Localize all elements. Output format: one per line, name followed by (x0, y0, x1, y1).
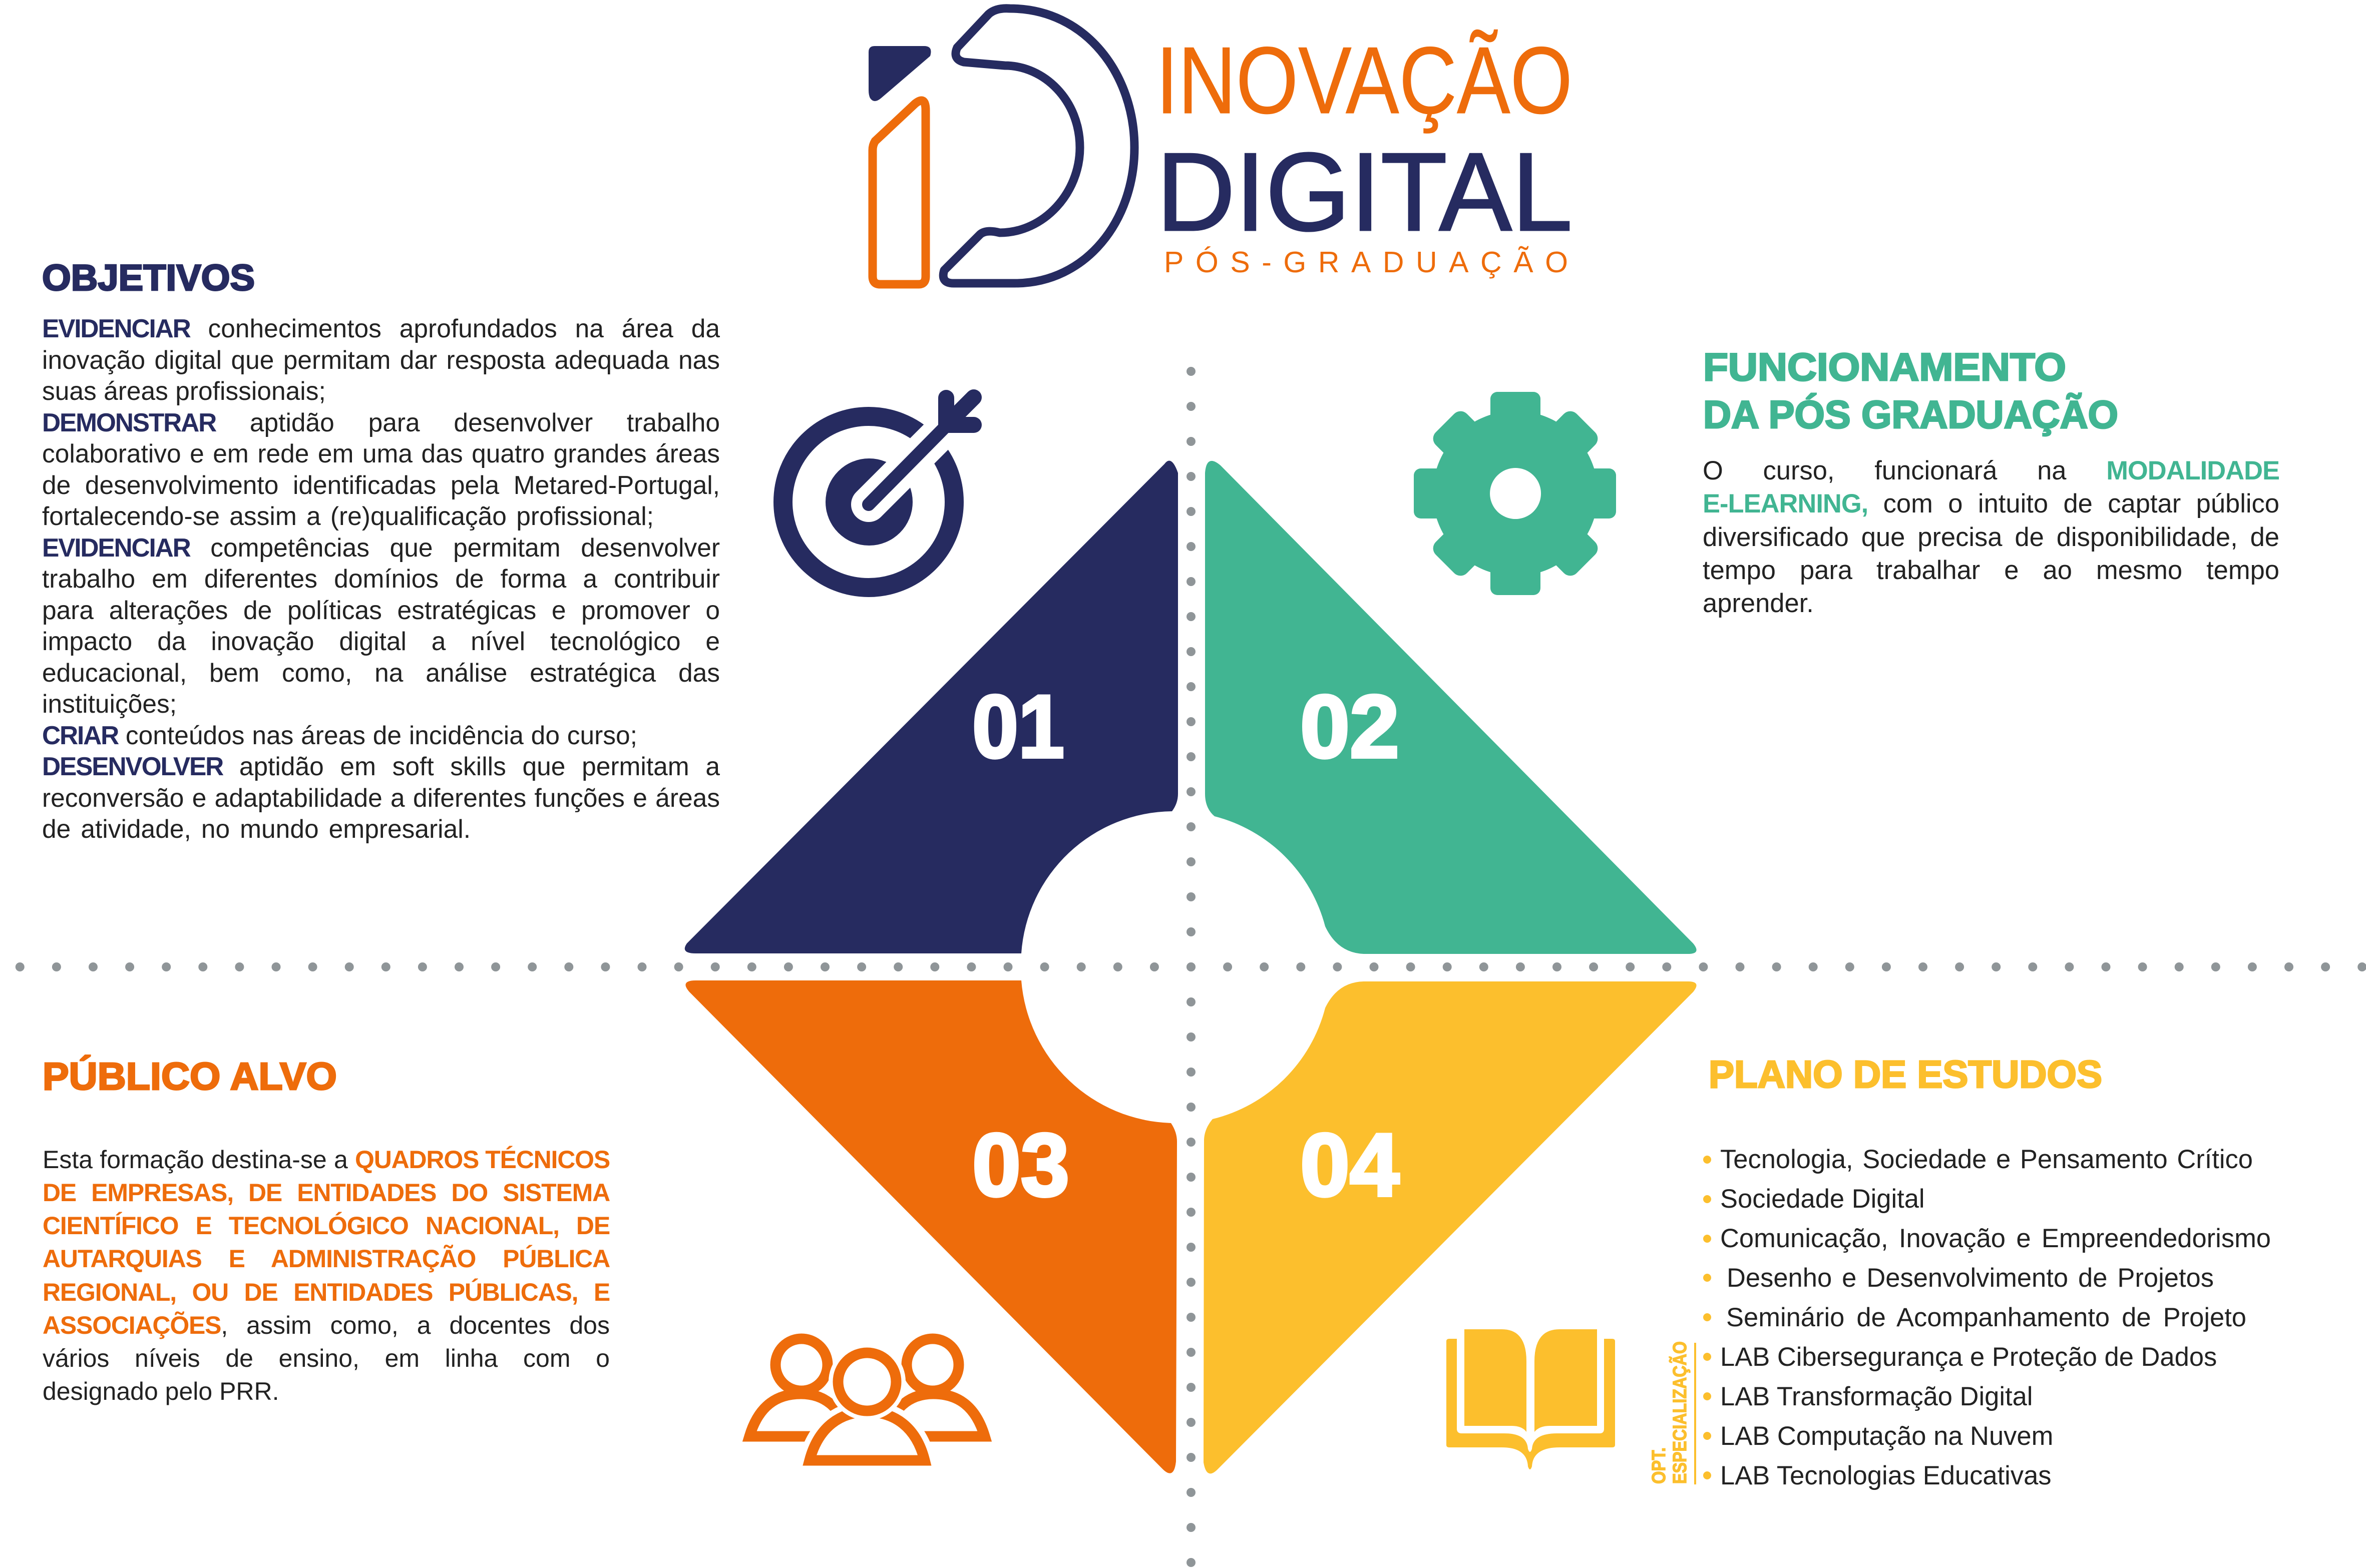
text block: course list (1720, 1144, 2271, 1490)
text block: funcionamento description: E-LEARNING, com o intuito de captar público (1703, 489, 2279, 518)
text block: objetivos list: trabalho em diferentes domínios de forma a contribuir (42, 564, 720, 593)
text block: público alvo description (43, 1145, 610, 1405)
logo: Inovação Digital Pós-Graduação (869, 9, 1572, 284)
list bullets (1703, 1156, 1711, 1479)
panel: público alvo (43, 1055, 610, 1405)
text block: course list: Desenho e Desenvolvimento de Projetos (1727, 1263, 2214, 1292)
text block: objetivos list: educacional, bem como, na análise estratégica das (42, 658, 720, 687)
text block: público alvo description: ASSOCIAÇÕES, assim como, a docentes dos (43, 1311, 610, 1339)
text block: objetivos list: para alterações de políticas estratégicas e promover o (42, 596, 720, 625)
label: opt. especialização: ESPECIALIZAÇÃO (1669, 1341, 1691, 1484)
label: opt. especialização: OPT. (1649, 1447, 1670, 1484)
quadrant 03: 03 (972, 1115, 1069, 1215)
icon: three people (749, 1339, 985, 1460)
heading: funcionamento da pós graduação: FUNCIONAMENTO (1703, 345, 2066, 389)
heading: público alvo: PÚBLICO ALVO (43, 1055, 337, 1098)
text block: funcionamento description: aprender. (1703, 589, 1814, 618)
text block: course list: LAB Tecnologias Educativas (1720, 1460, 2052, 1490)
text block: público alvo description: AUTARQUIAS E ADMINISTRAÇÃO PÚBLICA (43, 1245, 610, 1273)
heading: objetivos: OBJETIVOS (42, 258, 255, 298)
panel: plano de estudos (1709, 1053, 2271, 1490)
text block: course list: Seminário de Acompanhamento de Projeto (1726, 1302, 2246, 1332)
icon: gear (1414, 392, 1616, 595)
panel: funcionamento da pós graduação (1703, 345, 2279, 618)
logo word: INOVAÇÃO: INOVAÇÃO (1156, 28, 1572, 134)
text block: objetivos list: instituições; (42, 689, 177, 718)
text block: course list: Sociedade Digital (1720, 1184, 1925, 1213)
quadrant 02 (1205, 461, 1697, 954)
logo word: PÓS-GRADUAÇÃO: PÓS-GRADUAÇÃO (1164, 246, 1568, 279)
text block: objetivos list: suas áreas profissionais; (42, 376, 326, 405)
text block: objetivos list: EVIDENCIAR conhecimentos aprofundados na área da (42, 314, 720, 343)
text block: público alvo description: CIENTÍFICO E TECNOLÓGICO NACIONAL, DE (43, 1212, 610, 1240)
panel: objetivos (42, 258, 720, 843)
text block: público alvo description: Esta formação destina-se a QUADROS TÉCNICOS (43, 1145, 610, 1173)
quadrant 01 (685, 461, 1178, 953)
icon: open book (1446, 1329, 1615, 1469)
heading: plano de estudos: PLANO DE ESTUDOS (1709, 1053, 2102, 1096)
text block: funcionamento description: tempo para trabalhar e ao mesmo tempo (1703, 556, 2279, 585)
logo mark: navy letter D (943, 9, 1134, 283)
quadrant 01: 01 (972, 677, 1064, 776)
text block: objetivos list: DEMONSTRAR aptidão para desenvolver trabalho (42, 408, 720, 437)
text block: objetivos list: EVIDENCIAR competências que permitam desenvolver (42, 533, 720, 562)
text block: público alvo description: REGIONAL, OU DE ENTIDADES PÚBLICAS, E (43, 1278, 610, 1306)
text block: objetivos list: DESENVOLVER aptidão em soft skills que permitam a (42, 752, 720, 781)
text block: público alvo description: vários níveis de ensino, em linha com o (43, 1344, 610, 1372)
text block: course list: Tecnologia, Sociedade e Pensamento Crítico (1720, 1144, 2253, 1174)
logo word: DIGITAL: DIGITAL (1156, 130, 1572, 254)
text block: objetivos list: impacto da inovação digital a nível tecnológico e (42, 627, 720, 656)
logo mark: orange numeral 1 (873, 101, 926, 284)
text block: público alvo description: designado pelo PRR. (43, 1377, 279, 1405)
text block: objetivos list: de desenvolvimento identificadas pela Metared-Portugal, (42, 470, 720, 499)
text block: objetivos list (42, 314, 720, 843)
text block: course list: Comunicação, Inovação e Empreendedorismo (1720, 1223, 2271, 1253)
quadrant 02: 02 (1300, 677, 1399, 776)
heading: funcionamento da pós graduação: DA PÓS GRADUAÇÃO (1703, 392, 2118, 436)
icon: target with arrow (783, 397, 974, 588)
text block: course list: LAB Computação na Nuvem (1720, 1421, 2053, 1450)
text block: funcionamento description (1703, 456, 2279, 618)
text block: público alvo description: DE EMPRESAS, DE ENTIDADES DO SISTEMA (43, 1179, 610, 1207)
label: opt. especialização (1649, 1341, 1696, 1484)
text block: objetivos list: CRIAR conteúdos nas áreas de incidência do curso; (42, 721, 637, 750)
text block: objetivos list: colaborativo e em rede em uma das quatro grandes áreas (42, 439, 720, 468)
quadrant 04 (1204, 981, 1697, 1473)
text block: course list: LAB Transformação Digital (1720, 1381, 2033, 1411)
text block: funcionamento description: diversificado que precisa de disponibilidade, de (1703, 522, 2279, 552)
heading: funcionamento da pós graduação (1703, 345, 2118, 436)
quadrant 03 (685, 980, 1177, 1473)
text block: objetivos list: fortalecendo-se assim a (re)qualificação profissional; (42, 501, 654, 531)
quadrant 04: 04 (1300, 1115, 1399, 1215)
logo mark: navy flag (869, 46, 931, 101)
text block: funcionamento description: O curso, funcionará na MODALIDADE (1703, 456, 2279, 485)
text block: objetivos list: reconversão e adaptabilidade a diferentes funções e áreas (42, 783, 720, 812)
text block: course list: LAB Cibersegurança e Proteção de Dados (1720, 1342, 2217, 1371)
text block: objetivos list: de atividade, no mundo empresarial. (42, 814, 471, 843)
text block: objetivos list: inovação digital que permitam dar resposta adequada nas (42, 345, 720, 374)
